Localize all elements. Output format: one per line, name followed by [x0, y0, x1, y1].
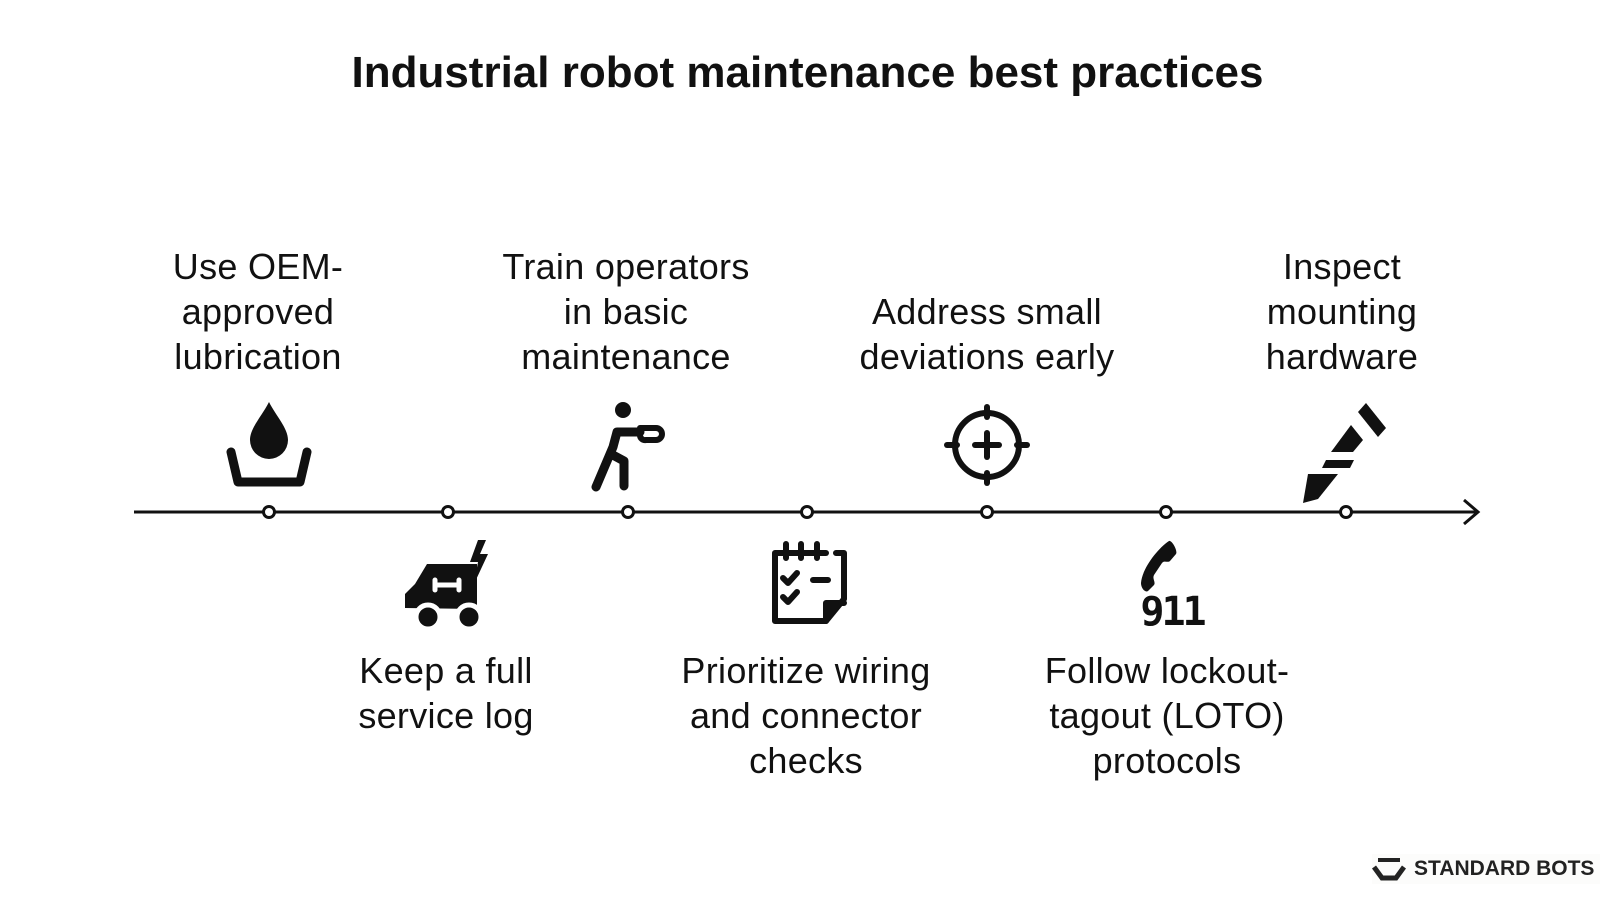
timeline axis with arrow	[134, 500, 1478, 524]
label: OEM lubrication	[173, 246, 343, 377]
icon: checklist calendar	[775, 544, 844, 621]
label: OEM lubrication: approved	[182, 291, 334, 332]
label: inspect mounting	[1266, 246, 1418, 377]
label: LOTO: protocols	[1093, 740, 1241, 781]
label: train operators: in basic	[564, 291, 688, 332]
icon: target crosshair	[947, 407, 1027, 483]
icon: boxer figure	[596, 402, 662, 487]
label: OEM lubrication: lubrication	[174, 336, 342, 377]
label: LOTO	[1045, 650, 1289, 781]
label: OEM lubrication: Use OEM-	[173, 246, 343, 287]
icon: screwdriver/pen	[1303, 403, 1386, 503]
label: address deviations: Address small	[872, 291, 1102, 332]
label: wiring checks: and connector	[690, 695, 922, 736]
label: LOTO: Follow lockout-	[1045, 650, 1289, 691]
label: address deviations	[860, 291, 1114, 377]
label: address deviations: deviations early	[860, 336, 1114, 377]
label: wiring checks: Prioritize wiring	[681, 650, 931, 691]
label: inspect mounting: mounting	[1267, 291, 1417, 332]
icon: phone 911: 911	[1140, 589, 1206, 635]
logo: Standard Bots: STANDARD BOTS	[1414, 857, 1594, 880]
title: Industrial robot maintenance best practices	[351, 48, 1264, 97]
label: wiring checks: checks	[749, 740, 863, 781]
label: service log	[358, 650, 534, 736]
label: inspect mounting: hardware	[1266, 336, 1418, 377]
label: train operators: maintenance	[521, 336, 731, 377]
label: train operators: Train operators	[502, 246, 750, 287]
label: wiring checks	[681, 650, 931, 781]
icon: phone 911	[1140, 541, 1206, 635]
timeline dots	[264, 506, 1352, 518]
label: service log: Keep a full	[359, 650, 533, 691]
label: train operators	[502, 246, 750, 377]
icon: oil drop basin	[231, 402, 307, 482]
label: service log: service log	[358, 695, 534, 736]
icon: service car	[405, 540, 488, 629]
label: inspect mounting: Inspect	[1283, 246, 1401, 287]
logo: Standard Bots	[1372, 854, 1600, 884]
label: LOTO: tagout (LOTO)	[1049, 695, 1285, 736]
